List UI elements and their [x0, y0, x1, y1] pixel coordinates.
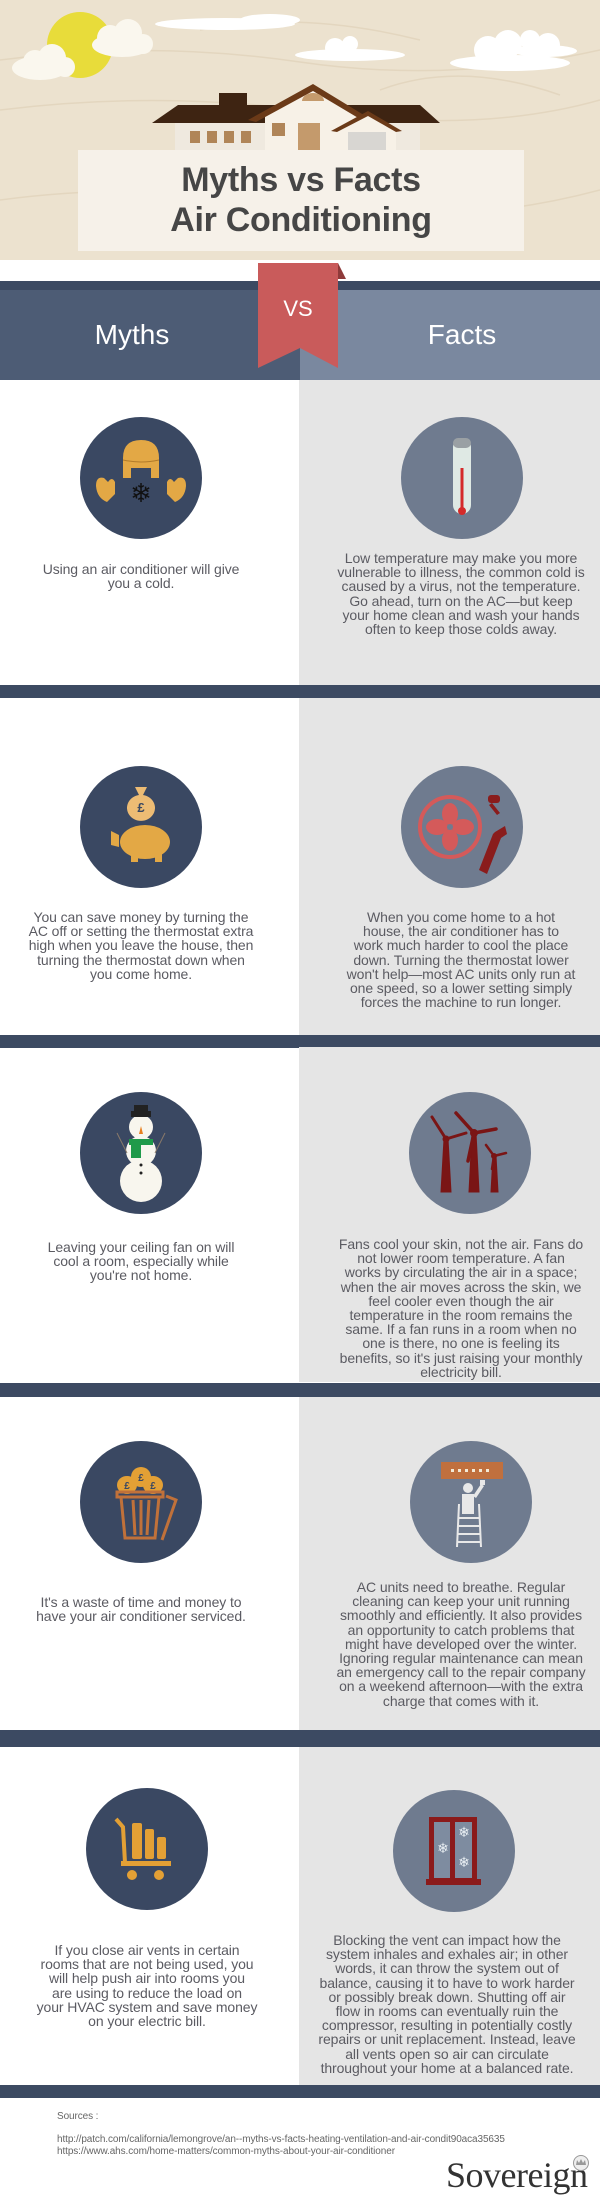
- myth text: Using an air conditioner will give: [43, 561, 239, 577]
- icon: trash can with money: £: [138, 1473, 144, 1484]
- fact text: one speed, so a lower setting simply: [350, 980, 572, 996]
- fact text: Ignoring regular maintenance can mean: [339, 1650, 583, 1666]
- icon: crown badge: [573, 2155, 589, 2171]
- fact text: an emergency call to the repair company: [336, 1664, 586, 1680]
- myth text: have your air conditioner serviced.: [36, 1608, 246, 1624]
- logo: Sovereign: Sovereign: [446, 2155, 587, 2195]
- fact text: your home clean and wash your hands: [342, 607, 579, 623]
- myth text: If you close air vents in certain: [54, 1942, 240, 1958]
- icon: AC unit and person on ladder: [410, 1441, 532, 1563]
- fact text: work much harder to cool the place: [354, 937, 568, 953]
- facts label: [300, 290, 600, 380]
- header band: myths vs facts: [0, 263, 600, 380]
- clouds: [12, 19, 153, 80]
- myth text: you a cold.: [108, 575, 174, 591]
- sources: Sources :: [57, 2111, 98, 2122]
- fact text: compressor, resulting in potentially costly: [322, 2017, 572, 2033]
- icon: window with snowflakes: [393, 1790, 515, 1912]
- fact text: same. If a fan runs in a room when no: [345, 1321, 577, 1337]
- myths label: Myths: [95, 319, 169, 350]
- fact text: when the air moves across the skin, we: [341, 1279, 581, 1295]
- icon: sun: [47, 12, 113, 78]
- icon: trash can with money: £: [150, 1481, 156, 1492]
- myth text: AC off or setting the thermostat extra: [29, 923, 253, 939]
- fact text: vulnerable to illness, the common cold is: [337, 564, 585, 580]
- title box: [78, 150, 524, 251]
- fact text: feel cooler even though the air: [368, 1293, 554, 1309]
- myth text: turning the thermostat down when: [37, 952, 245, 968]
- fact text: on a weekend afternoon—with the extra: [339, 1678, 583, 1694]
- myth text: rooms that are not being used, you: [41, 1956, 253, 1972]
- sources: [57, 2111, 505, 2156]
- fact text: or possibly break down. Shutting off air: [328, 1989, 566, 2005]
- sources: http://patch.com/california/lemongrove/an--myths-vs-facts-heating-ventilation-and-air-condit90aca35635: [57, 2134, 505, 2145]
- icon: window with snowflakes: ❄: [458, 1854, 470, 1870]
- fact text: [318, 1932, 576, 2076]
- icon: trash can with money: £: [124, 1481, 130, 1492]
- fact text: repairs or unit replacement. Instead, leave: [318, 2031, 576, 2047]
- fact text: down. Turning the thermostat lower: [353, 952, 569, 968]
- fact text: not lower room temperature. A fan: [357, 1250, 565, 1266]
- fact text: Go ahead, turn on the AC—but keep: [349, 593, 573, 609]
- panel 2: [0, 698, 600, 1048]
- myth text: your HVAC system and save money: [37, 1999, 257, 2015]
- fact text: benefits, so it's just raising your monthly: [340, 1350, 582, 1366]
- panel 1: [0, 380, 600, 698]
- fact text: [336, 1579, 586, 1709]
- fact text: throughout your home at a balanced rate.: [321, 2060, 573, 2076]
- myths label: [0, 290, 300, 380]
- fact text: won't help—most AC units only run at: [347, 966, 575, 982]
- fact text: words, it can throw the system out of: [335, 1960, 559, 1976]
- fact text: smoothly and efficiently. It also provides: [340, 1607, 582, 1623]
- icon: money bag and piggy bank: [80, 766, 202, 888]
- fact text: [346, 909, 576, 1010]
- fact text: all vents open so air can circulate: [345, 2046, 549, 2062]
- fact text: When you come home to a hot: [367, 909, 555, 925]
- fact text: Blocking the vent can impact how the: [333, 1932, 561, 1948]
- myth text: [36, 1594, 246, 1624]
- icon: money bag and piggy bank: £: [137, 800, 145, 815]
- fact text: AC units need to breathe. Regular: [357, 1579, 565, 1595]
- myth text: [28, 909, 254, 982]
- icon: window with snowflakes: ❄: [437, 1840, 449, 1856]
- icon: winter hat, mittens, snowflake: ❄: [130, 478, 152, 508]
- fact text: house, the air conditioner has to: [363, 923, 559, 939]
- fact text: charge that comes with it.: [383, 1693, 539, 1709]
- myth text: [36, 1942, 258, 2029]
- fact text: [339, 1236, 583, 1380]
- fact text: often to keep those colds away.: [365, 621, 557, 637]
- ribbon: vs: [258, 263, 346, 368]
- fact text: caused by a virus, not the temperature.: [342, 578, 580, 594]
- fact text: might have developed over the winter.: [345, 1636, 577, 1652]
- myth text: cool a room, especially while: [53, 1253, 229, 1269]
- fact text: system inhales and exhales air; in other: [326, 1946, 568, 1962]
- fact text: [337, 550, 585, 637]
- myth text: Leaving your ceiling fan on will: [48, 1239, 234, 1255]
- myth text: high when you leave the house, then: [29, 937, 253, 953]
- myth text: It's a waste of time and money to: [41, 1594, 241, 1610]
- icon: wind turbines: [409, 1092, 531, 1214]
- icon: window with snowflakes: ❄: [458, 1824, 470, 1840]
- myth text: you're not home.: [90, 1267, 192, 1283]
- myth text: are using to reduce the load on: [52, 1985, 242, 2001]
- myth text: [43, 561, 239, 591]
- ribbon: vs: VS: [283, 296, 313, 321]
- panel 4: [0, 1397, 600, 1747]
- fact text: electricity bill.: [420, 1364, 502, 1380]
- icon: thermometer: [401, 417, 523, 539]
- fact text: works by circulating the air in a space;: [345, 1264, 577, 1280]
- myth text: you come home.: [90, 966, 192, 982]
- fact text: forces the machine to run longer.: [361, 994, 561, 1010]
- icon: snowman: [80, 1092, 202, 1214]
- fact text: flow in rooms can eventually ruin the: [336, 2003, 558, 2019]
- header: beige sky background: [0, 0, 600, 260]
- icon: winter hat, mittens, snowflake: [80, 417, 202, 539]
- icon: trash can with money: [80, 1441, 202, 1563]
- facts label: Facts: [428, 319, 496, 350]
- icon: fan and wrench: [401, 766, 523, 888]
- panel 3: [0, 1047, 600, 1397]
- fact text: one is there, no one is feeling its: [362, 1335, 560, 1351]
- icon: house: [152, 84, 440, 150]
- title box: Air Conditioning: [170, 201, 432, 239]
- sources: https://www.ahs.com/home-matters/common-myths-about-your-air-conditioner: [57, 2146, 395, 2156]
- myth text: [48, 1239, 234, 1283]
- fact text: temperature in the room remains the: [350, 1307, 572, 1323]
- fact text: balance, causing it to have to work harder: [320, 1975, 574, 1991]
- title box: Myths vs Facts: [181, 161, 421, 199]
- fact text: cleaning can keep your unit running: [352, 1593, 570, 1609]
- fact text: an opportunity to catch problems that: [348, 1622, 574, 1638]
- fact text: Low temperature may make you more: [345, 550, 577, 566]
- myth text: will help push air into rooms you: [49, 1970, 245, 1986]
- fact text: Fans cool your skin, not the air. Fans do: [339, 1236, 583, 1252]
- myth text: You can save money by turning the: [34, 909, 248, 925]
- panel 5: [0, 1747, 600, 2098]
- icon: trolley: [86, 1788, 208, 1910]
- myth text: on your electric bill.: [88, 2013, 206, 2029]
